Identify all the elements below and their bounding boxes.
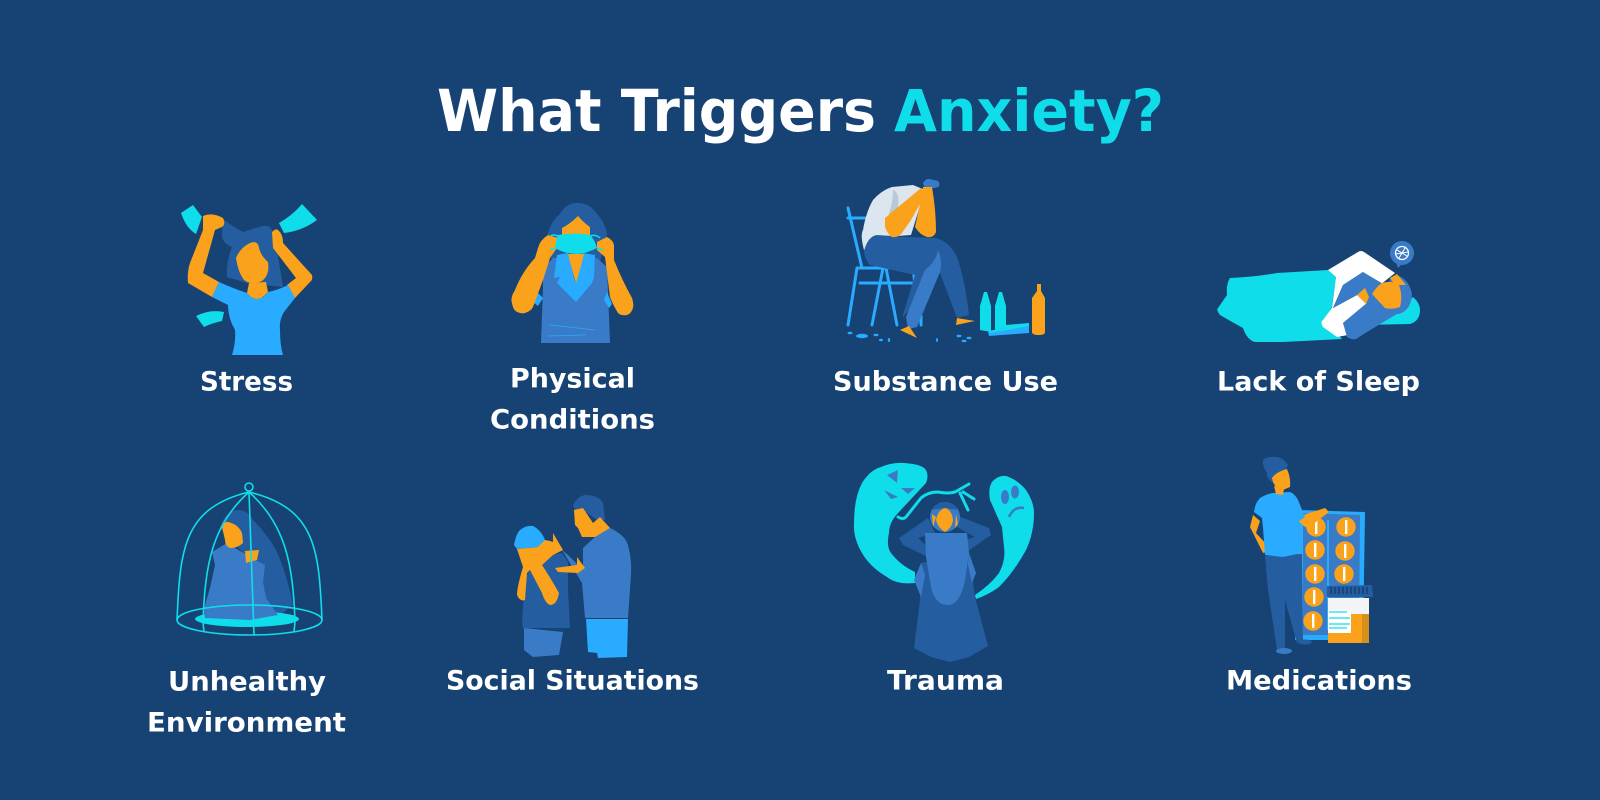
- illustration: woman putting on face mask: [511, 203, 633, 343]
- panel: stress: [181, 204, 317, 398]
- illustration: man with blister pack and pill bottle: [1250, 457, 1373, 654]
- title: What Triggers: [437, 77, 876, 145]
- label: Unhealthy Environment: Unhealthy: [168, 666, 326, 698]
- panel: physical conditions: [490, 203, 655, 436]
- label: Unhealthy Environment: Environment: [147, 708, 346, 738]
- label: Physical Conditions: [490, 364, 655, 436]
- label: Physical Conditions: Physical: [510, 364, 635, 394]
- illustration: person haunted by ghosts: [854, 463, 1034, 662]
- panel: trauma: [854, 463, 1034, 696]
- illustration: hooded person inside a birdcage: [177, 483, 322, 635]
- panel: substance use: [833, 179, 1058, 398]
- illustration: man on chair with bottles: [848, 179, 1045, 342]
- label: Lack of Sleep: Lack of Sleep: [1217, 366, 1420, 398]
- label: Social Situations: Social Situations: [446, 666, 699, 696]
- panel: social situations: [446, 495, 699, 696]
- label: Stress: Stress: [200, 366, 293, 398]
- label: Physical Conditions: Conditions: [490, 404, 655, 436]
- panel: lack of sleep: [1217, 241, 1420, 398]
- title: Anxiety?: [894, 77, 1164, 145]
- illustration: man comforting crying woman: [514, 495, 631, 658]
- label: Medications: Medications: [1226, 666, 1412, 696]
- label: Substance Use: Substance Use: [833, 366, 1058, 398]
- label: Trauma: Trauma: [887, 666, 1004, 696]
- label: Unhealthy Environment: [147, 666, 346, 738]
- illustration: person lying awake in bed: [1217, 241, 1420, 342]
- panel: medications: [1226, 457, 1412, 696]
- title: [437, 77, 1164, 145]
- illustration: woman pulling hair with flying papers: [181, 204, 317, 355]
- panel: unhealthy environment: [147, 483, 346, 738]
